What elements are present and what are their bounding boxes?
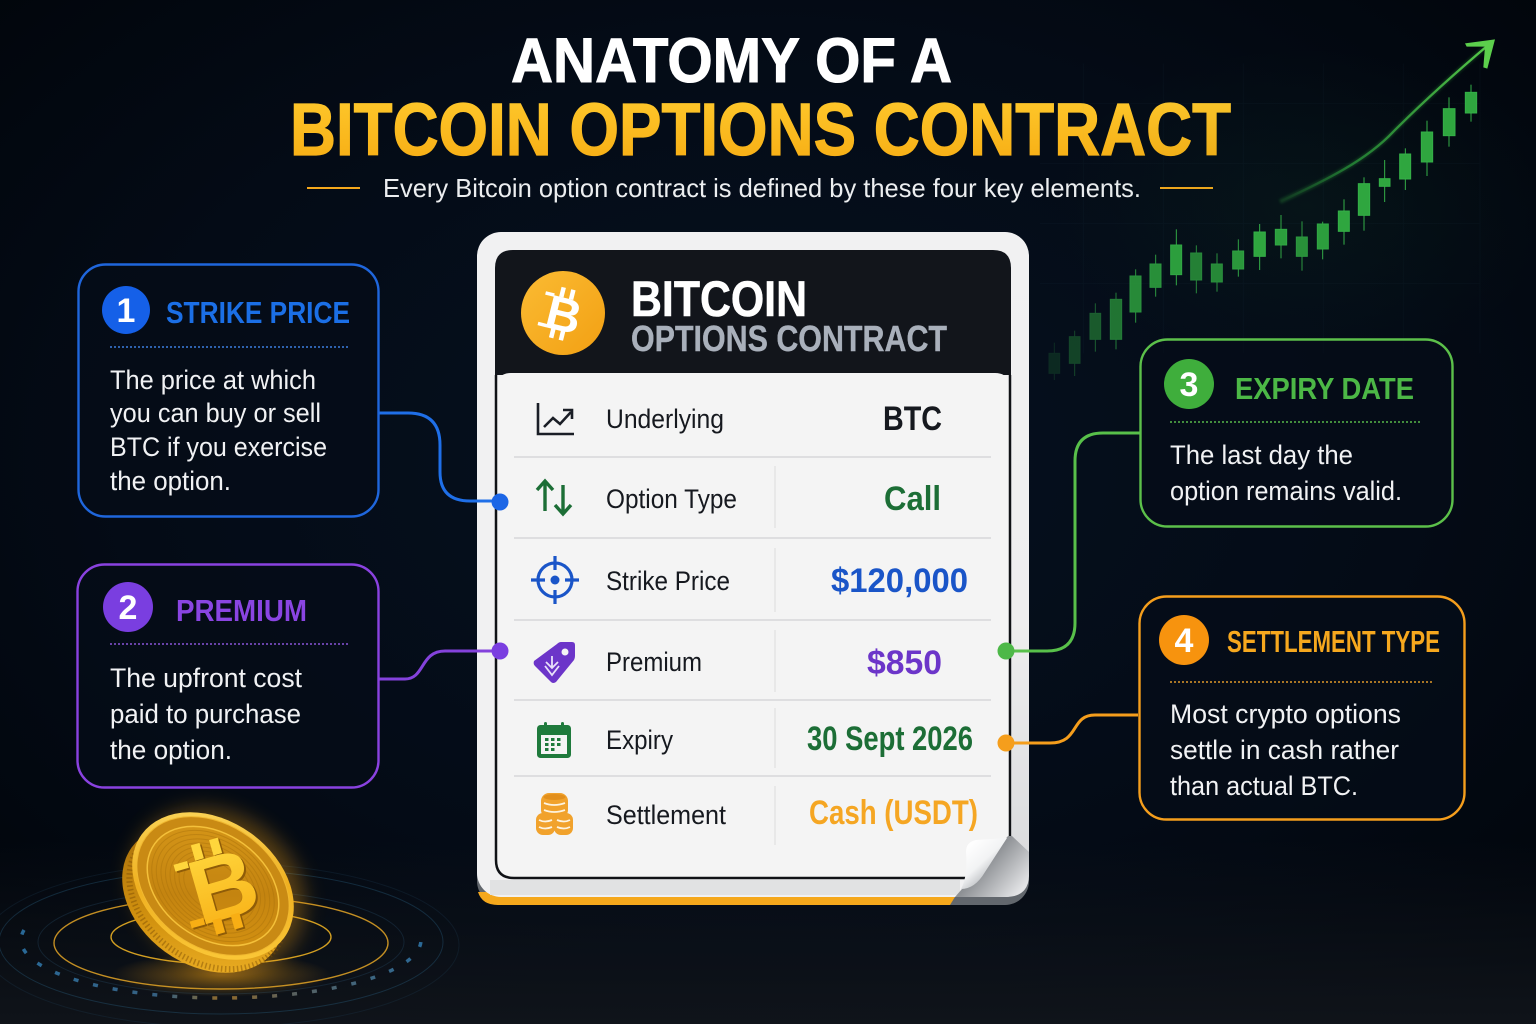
row: premium bbox=[534, 642, 942, 683]
header bitcoin badge: B bbox=[540, 286, 587, 346]
coin halo bbox=[99, 774, 337, 1006]
coin bitcoin symbol: B bbox=[178, 829, 270, 945]
subtitle: Every Bitcoin option contract is defined by these four key elements. bbox=[383, 173, 1141, 203]
panel: expiry date bbox=[1140, 340, 1452, 526]
header subtitle: OPTIONS CONTRACT bbox=[631, 318, 947, 359]
heading: SETTLEMENT TYPE bbox=[1227, 624, 1440, 659]
row: option type: Call bbox=[884, 480, 941, 518]
icon: up and down arrows bbox=[537, 481, 571, 514]
contract table bbox=[496, 373, 1010, 878]
description: the option. bbox=[110, 735, 232, 765]
badge 1 bbox=[102, 286, 150, 334]
description: settle in cash rather bbox=[1170, 735, 1399, 765]
card back and orange edge bbox=[477, 245, 1029, 905]
heading: PREMIUM bbox=[176, 593, 307, 628]
badge 1: 1 bbox=[117, 292, 135, 330]
description bbox=[110, 663, 302, 765]
contract card bbox=[477, 232, 1029, 905]
row: underlying: BTC bbox=[883, 400, 942, 438]
badge 2: 2 bbox=[119, 589, 137, 627]
description bbox=[1170, 699, 1401, 801]
description: than actual BTC. bbox=[1170, 771, 1358, 801]
badge 3 bbox=[1164, 359, 1214, 409]
icon: line chart bbox=[538, 403, 574, 434]
panel: strike price bbox=[78, 264, 378, 516]
row: expiry bbox=[537, 720, 973, 758]
description: The price at which bbox=[110, 365, 316, 395]
coin face bbox=[104, 782, 322, 990]
title line 2: BITCOIN OPTIONS CONTRACT bbox=[290, 88, 1231, 171]
row: option type bbox=[537, 480, 941, 518]
candlestick chart with rising arrow bbox=[1040, 39, 1536, 380]
icon: calendar bbox=[537, 722, 571, 758]
row: expiry: Expiry bbox=[606, 725, 673, 755]
row: settlement: Cash (USDT) bbox=[809, 794, 978, 832]
row: underlying bbox=[538, 400, 942, 438]
coin edge bbox=[94, 795, 312, 1003]
panel: premium bbox=[78, 564, 378, 788]
icon: coin stack bbox=[536, 793, 573, 835]
coin bitcoin symbol: B bbox=[180, 830, 272, 947]
title bbox=[290, 26, 1231, 171]
description: The last day the bbox=[1170, 440, 1353, 470]
title line 1: ANATOMY OF A bbox=[511, 26, 952, 96]
row: strike price bbox=[531, 556, 968, 604]
description: you can buy or sell bbox=[110, 398, 321, 428]
description: paid to purchase bbox=[110, 699, 301, 729]
description: BTC if you exercise bbox=[110, 432, 327, 462]
header bitcoin badge bbox=[521, 271, 605, 355]
connector: settlement to table bbox=[998, 715, 1138, 752]
badge 3: 3 bbox=[1180, 366, 1198, 404]
description bbox=[1170, 440, 1402, 506]
panel: settlement type bbox=[1140, 596, 1464, 820]
heading: EXPIRY DATE bbox=[1235, 371, 1414, 406]
row: option type: Option Type bbox=[606, 484, 737, 514]
icon: price tag bbox=[534, 642, 575, 683]
heading: STRIKE PRICE bbox=[166, 295, 350, 330]
row: settlement bbox=[536, 793, 978, 835]
row: premium: Premium bbox=[606, 647, 702, 677]
icon: target crosshair bbox=[531, 556, 579, 604]
bitcoin coin on glowing rings bbox=[0, 774, 459, 1024]
base rings bbox=[0, 863, 459, 1024]
card header bbox=[495, 250, 1011, 375]
description: the option. bbox=[110, 466, 231, 496]
row: underlying: Underlying bbox=[606, 404, 724, 434]
badge 4 bbox=[1159, 615, 1209, 665]
description: Most crypto options bbox=[1170, 699, 1401, 729]
badge 4: 4 bbox=[1175, 622, 1194, 660]
row: expiry: 30 Sept 2026 bbox=[807, 720, 973, 758]
description: option remains valid. bbox=[1170, 476, 1402, 506]
page curl bbox=[955, 836, 1029, 897]
connector: expiry to table bbox=[998, 433, 1140, 660]
connector: strike price to table bbox=[379, 413, 508, 510]
header title: BITCOIN bbox=[631, 271, 807, 327]
row: strike price: Strike Price bbox=[606, 566, 730, 596]
row: settlement: Settlement bbox=[606, 800, 726, 830]
description bbox=[110, 365, 327, 496]
card sheet bbox=[477, 232, 1029, 897]
row: strike price: $120,000 bbox=[831, 562, 968, 600]
description: The upfront cost bbox=[110, 663, 302, 693]
badge 2 bbox=[103, 582, 153, 632]
row: premium: $850 bbox=[867, 644, 942, 682]
connector: premium to table bbox=[379, 642, 508, 679]
